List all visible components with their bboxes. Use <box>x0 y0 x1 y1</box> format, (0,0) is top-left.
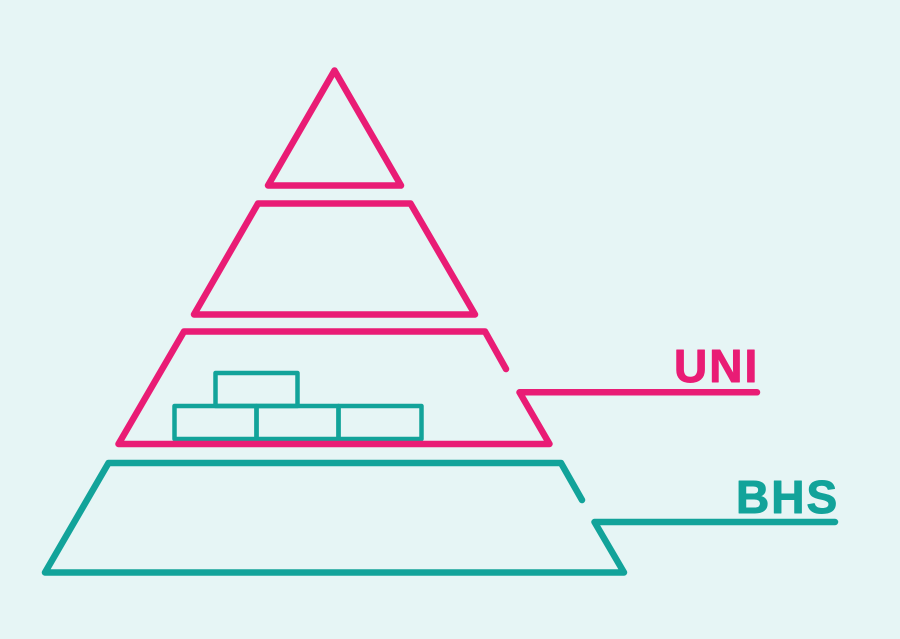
pyramid tier: BHS trapezoid with leader line <box>45 463 835 572</box>
teal bricks <box>174 373 422 439</box>
pyramid tier: second trapezoid <box>194 204 475 314</box>
pyramid tier: apex triangle <box>268 70 401 186</box>
label: BHS: BHS <box>736 471 839 523</box>
label: UNI: UNI <box>674 340 759 392</box>
pyramid tier: UNI trapezoid with leader line <box>118 332 757 444</box>
